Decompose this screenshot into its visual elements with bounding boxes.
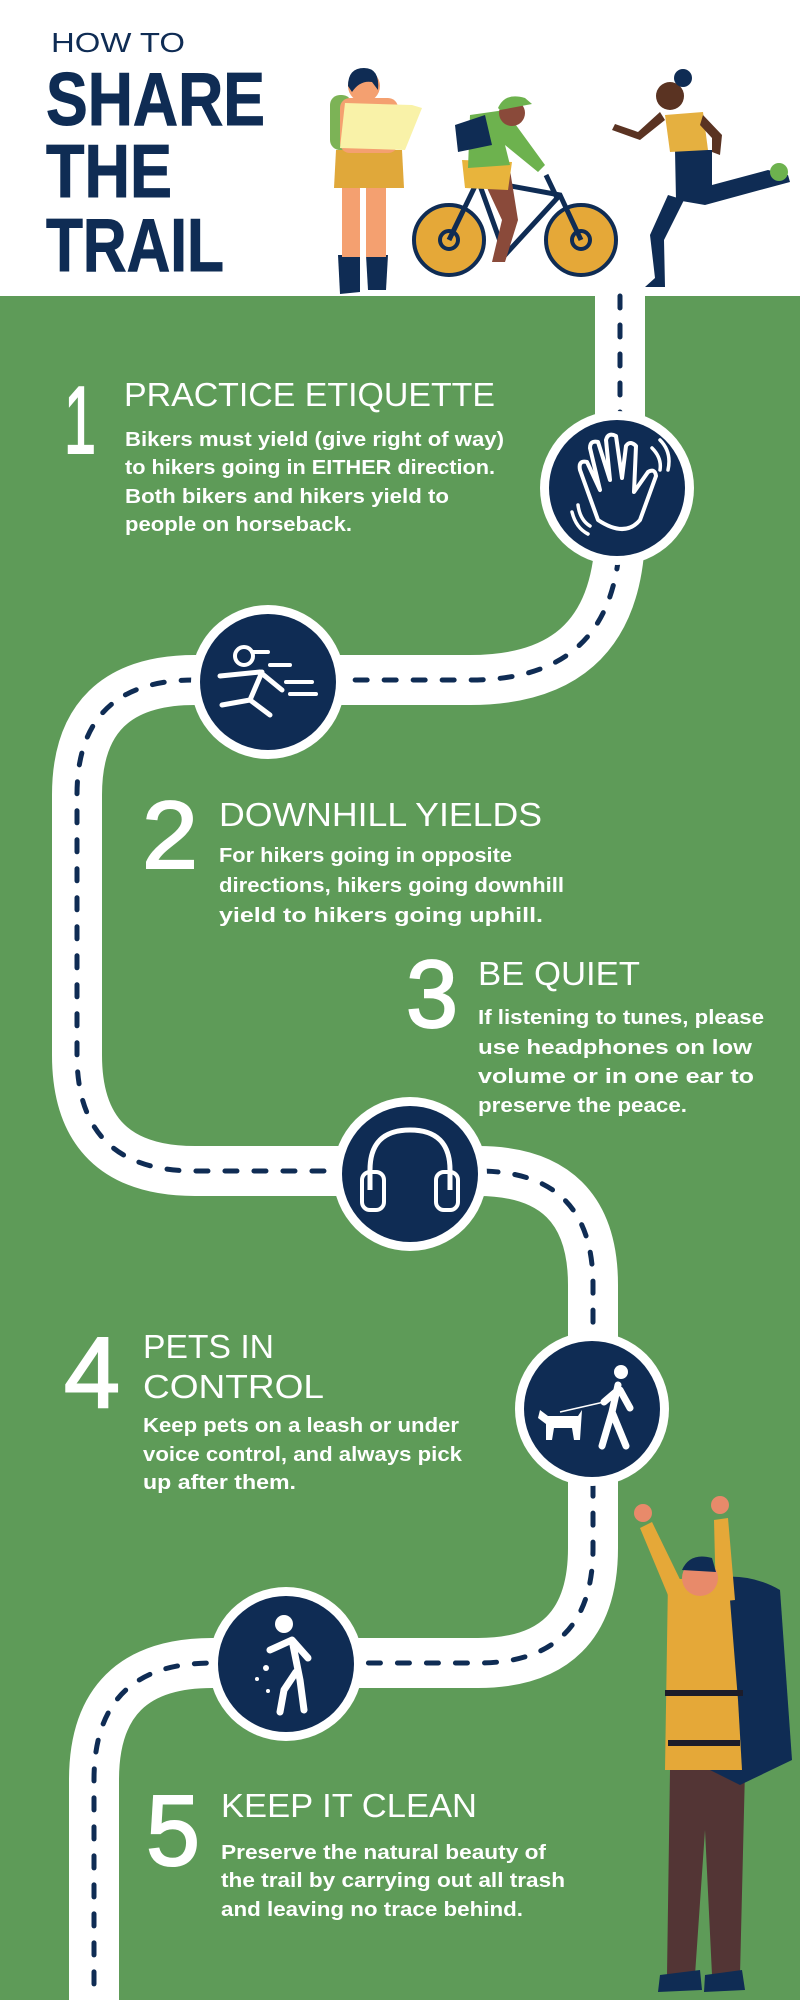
icon circle 2: running person (191, 605, 345, 759)
step 1: Both bikers and hikers yield to (125, 486, 449, 508)
step 2: yield to hikers going uphill. (219, 905, 543, 927)
illustration: cyclist (414, 96, 616, 275)
step 2: For hikers going in opposite (219, 845, 512, 867)
icon circle 3: headphones (333, 1097, 487, 1251)
title: SHARE (46, 57, 265, 141)
step 5 (146, 1775, 565, 1921)
icon circle 5: person littering (209, 1587, 363, 1741)
title (46, 27, 265, 287)
illustration: runner (612, 69, 790, 287)
step 5: Preserve the natural beauty of (221, 1842, 546, 1864)
step 5: and leaving no trace behind. (221, 1899, 523, 1921)
step 3: If listening to tunes, please (478, 1007, 764, 1029)
step 2: DOWNHILL YIELDS (219, 796, 542, 833)
step 4: Keep pets on a leash or under (143, 1415, 459, 1437)
step 1: people on horseback. (125, 514, 352, 536)
title: THE (46, 129, 172, 213)
illustration: celebrating hiker (634, 1496, 792, 1992)
step 1: Bikers must yield (give right of way) (125, 429, 504, 451)
step 3 (406, 941, 764, 1117)
header background (0, 0, 800, 296)
step 5: 5 (146, 1775, 200, 1887)
step 3: preserve the peace. (478, 1095, 687, 1117)
step 4: voice control, and always pick (143, 1444, 463, 1466)
step 4: CONTROL (143, 1368, 324, 1405)
step 4: up after them. (143, 1472, 296, 1494)
step 1 (64, 367, 504, 536)
step 3: 3 (406, 941, 458, 1048)
step 4 (64, 1317, 463, 1494)
illustration: hiker with map (330, 68, 422, 294)
step 1: to hikers going in EITHER direction. (125, 457, 495, 479)
step 5: KEEP IT CLEAN (221, 1787, 477, 1824)
step 1: PRACTICE ETIQUETTE (124, 376, 495, 413)
trail road (77, 296, 620, 2000)
step 2 (142, 782, 564, 927)
step 3: BE QUIET (478, 955, 640, 992)
step 4: 4 (64, 1317, 120, 1429)
title: HOW TO (51, 27, 185, 58)
title: TRAIL (46, 203, 224, 287)
step 3: use headphones on low (478, 1037, 753, 1059)
icon circle 4: person walking dog (515, 1332, 669, 1486)
step 5: the trail by carrying out all trash (221, 1870, 565, 1892)
step 4: PETS IN (143, 1328, 274, 1365)
step 1: 1 (64, 367, 96, 474)
step 2: 2 (142, 782, 198, 889)
step 2: directions, hikers going downhill (219, 875, 564, 897)
step 3: volume or in one ear to (478, 1066, 754, 1088)
icon circle 1: waving hand (540, 411, 694, 565)
